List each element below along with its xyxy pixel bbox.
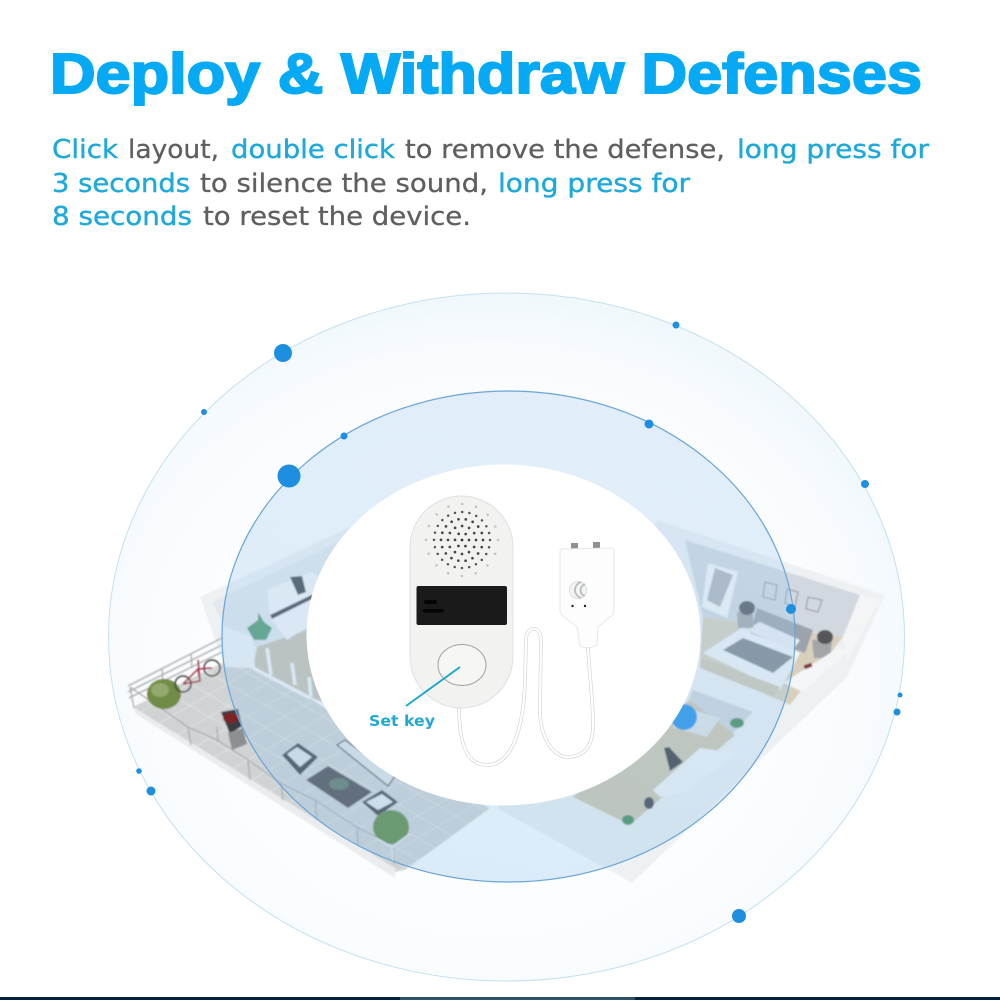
alarm device <box>369 496 614 765</box>
display segments <box>423 600 444 612</box>
blue dot behind device <box>671 704 697 730</box>
lower room wall <box>680 690 753 733</box>
bed platform <box>703 627 800 690</box>
low wall and posts <box>225 627 255 668</box>
inner signal ring <box>222 391 795 882</box>
plant: kitchen <box>247 612 272 640</box>
instructions text block: to remove the defense, <box>405 135 725 165</box>
set key button <box>438 644 486 686</box>
right building base <box>497 520 885 883</box>
bed <box>723 608 813 673</box>
set key pointer <box>406 667 460 706</box>
lounge chair two <box>362 790 398 816</box>
floor plan illustration <box>128 500 885 883</box>
plant: terrace right <box>373 810 411 862</box>
signal dots <box>136 322 902 923</box>
central white disc <box>306 464 700 806</box>
instructions text block: long press for <box>737 135 929 165</box>
device cable <box>459 629 593 765</box>
terrace floor <box>133 663 490 872</box>
display screen <box>416 586 507 625</box>
sensor contacts <box>571 605 586 607</box>
lower room plants <box>622 718 744 825</box>
lower room floor <box>573 700 735 825</box>
sensor probe <box>560 542 614 648</box>
instructions text block <box>52 135 929 232</box>
lower room desk <box>653 748 737 797</box>
wall pictures <box>763 582 822 612</box>
nightstands <box>737 601 833 658</box>
outer signal ring <box>108 293 904 981</box>
left building wall <box>200 500 450 668</box>
instructions text block: 3 seconds <box>52 169 190 199</box>
lounge chair one <box>282 743 318 775</box>
kitchen floor <box>253 630 340 705</box>
plant: terrace left <box>147 679 181 709</box>
instructions text block: to silence the sound, <box>200 169 488 199</box>
lamp <box>644 797 654 809</box>
instructions text block: long press for <box>498 169 690 199</box>
instructions text block: to reset the device. <box>203 202 471 232</box>
bedroom side panel <box>843 595 880 660</box>
instructions text block: double click <box>231 135 395 165</box>
kitchen counter <box>267 572 330 640</box>
mirror <box>702 563 738 618</box>
wood strip between rooms <box>700 658 780 697</box>
terrace edge <box>133 707 395 878</box>
bicycle <box>175 660 220 692</box>
lower room sofa <box>672 710 720 737</box>
bedroom floor <box>700 617 843 705</box>
grill <box>221 709 247 750</box>
bedroom back wall <box>685 540 860 637</box>
instructions text block: 8 seconds <box>52 202 192 232</box>
coffee table <box>306 766 372 808</box>
speaker grille <box>426 504 498 576</box>
bedroom desk <box>783 648 847 692</box>
office chair <box>664 747 683 771</box>
instructions text block: Click <box>52 135 118 165</box>
sofa <box>337 740 395 786</box>
sensor logo <box>570 582 586 598</box>
instructions text block: layout, <box>128 135 219 165</box>
device body <box>410 496 513 708</box>
bottom bar <box>0 997 1000 1000</box>
title: Deploy & Withdraw Defenses <box>50 42 922 106</box>
set key label: Set key <box>369 712 435 730</box>
terrace railing <box>128 638 411 864</box>
